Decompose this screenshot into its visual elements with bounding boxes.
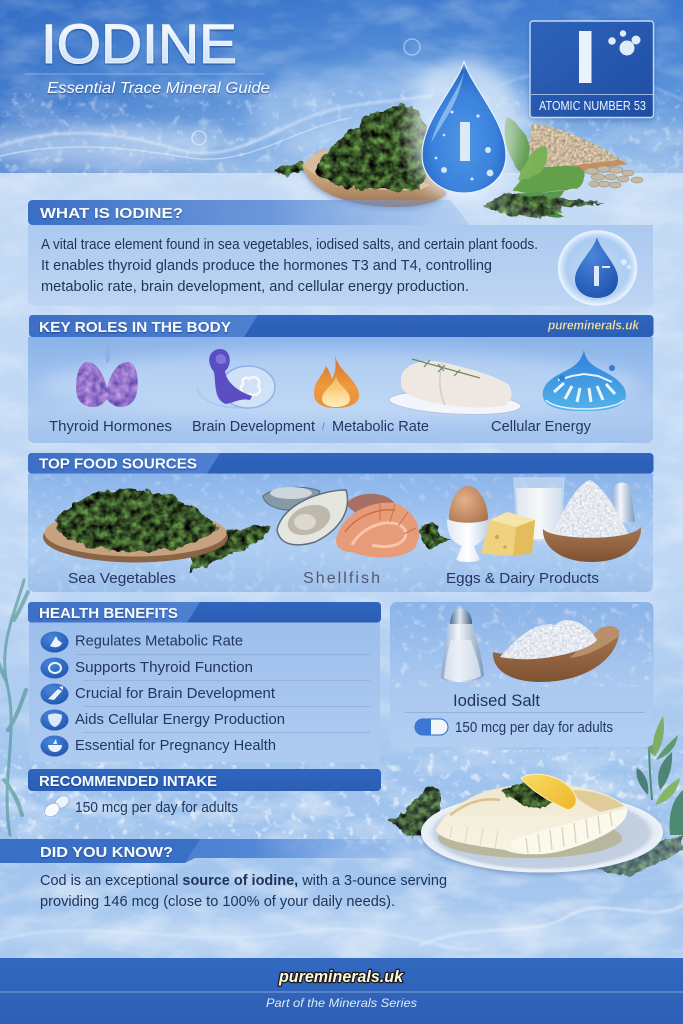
- sprig: left of bowl: [272, 160, 306, 177]
- milk glass: [514, 478, 564, 540]
- salmon piece: [346, 494, 396, 525]
- plate: [421, 792, 663, 872]
- footer brand: pureminerals.uk: [278, 968, 404, 986]
- description text: It enables thyroid glands produce the hormones T3 and T4, controlling: [41, 258, 492, 274]
- icon: drop orb: [558, 231, 636, 305]
- top shell: [263, 487, 320, 510]
- did you know text: [40, 873, 447, 910]
- sea vegetables on plate: [43, 489, 272, 572]
- herbs: [500, 782, 556, 810]
- salt pile: [550, 480, 630, 545]
- label: shellfish: Shellfish: [303, 570, 380, 587]
- header: key roles in the body: [29, 315, 654, 337]
- series line: Part of the Minerals Series: [266, 998, 417, 1010]
- salt shaker: [611, 482, 635, 522]
- subtitle: Essential Trace Mineral Guide: [47, 80, 270, 97]
- label: cellular energy: Cellular Energy: [491, 418, 591, 435]
- benefit: aids cellular energy production: [40, 710, 285, 730]
- oyster: [277, 490, 348, 545]
- header: what is iodine: WHAT IS IODINE?: [40, 205, 183, 222]
- salt shaker: [441, 608, 484, 682]
- label: metabolic rate: Metabolic Rate: [332, 418, 429, 435]
- icon: flame: [314, 355, 359, 408]
- header: health benefits: [28, 602, 381, 622]
- header: health benefits: HEALTH BENEFITS: [39, 605, 178, 622]
- panel: iodised salt: [390, 602, 654, 747]
- label: thyroid hormones: Thyroid Hormones: [49, 418, 172, 435]
- panel: top food sources: [28, 474, 653, 592]
- header: key roles in the body: KEY ROLES IN THE BODY: [39, 319, 231, 336]
- header: recommended intake: [28, 769, 381, 791]
- sauce: [438, 818, 622, 858]
- description text: A vital trace element found in sea vegetables, iodised salts, and certain plant foods.: [41, 237, 538, 253]
- description text: [41, 237, 538, 295]
- header: top food sources: TOP FOOD SOURCES: [39, 456, 197, 472]
- panel: what is iodine: [28, 225, 653, 306]
- did you know text: providing 146 mcg (close to 100% of your daily needs).: [40, 894, 395, 910]
- sprig: [388, 785, 440, 838]
- icon: thyroid: [76, 343, 138, 407]
- panel: health benefits: [28, 602, 381, 762]
- panel: key roles in the body: [28, 337, 653, 443]
- eggs and dairy group: [447, 478, 641, 562]
- header: what is iodine: [28, 200, 470, 225]
- cheese: [481, 512, 535, 556]
- recommended intake line: 150 mcg per day for adults: [75, 799, 238, 816]
- molecule icon: [608, 30, 640, 56]
- did you know text: Cod is an exceptional source of iodine, with a 3-ounce serving: [40, 873, 447, 889]
- benefit: aids cellular energy production: Aids Cellular Energy Production: [75, 711, 285, 728]
- spinach leaves: [505, 118, 584, 218]
- label: eggs and dairy products: Eggs & Dairy Products: [446, 570, 599, 587]
- egg: [449, 486, 488, 527]
- label: iodised salt: Iodised Salt: [453, 691, 540, 710]
- brand tag: pureminerals.uk: [547, 318, 640, 332]
- benefit: regulates metabolic rate: Regulates Metabolic Rate: [75, 632, 243, 650]
- dried seaweed pile: [316, 106, 428, 190]
- hero illustration: [272, 56, 643, 218]
- icon: fetus: [197, 349, 275, 408]
- big water drop: [408, 56, 520, 204]
- cod plate illustration: [388, 774, 683, 876]
- intake text: 150 mcg per day for adults: [455, 719, 613, 736]
- element card: iodine: [530, 21, 654, 118]
- icon: cellular energy: [543, 350, 626, 411]
- separator: /: [322, 422, 325, 433]
- benefit: supports thyroid function: Supports Thyroid Function: [75, 659, 253, 676]
- lemon wedge: [521, 774, 576, 810]
- wooden bowl: [302, 149, 446, 207]
- bowl of salt: [493, 620, 619, 682]
- egg cup: [447, 519, 490, 562]
- shellfish group: [263, 487, 449, 558]
- benefit: crucial for brain development: [40, 684, 276, 704]
- header: top food sources: [28, 453, 654, 474]
- benefit: supports thyroid function: [40, 658, 253, 678]
- wooden bowl: [543, 527, 641, 562]
- benefit: regulates metabolic rate: [40, 632, 243, 652]
- icon: pills: [42, 793, 71, 820]
- shrimp: [336, 503, 419, 558]
- header: recommended intake: RECOMMENDED INTAKE: [39, 773, 217, 790]
- beans: [585, 166, 643, 188]
- seaweed decoration: right edge: [636, 716, 683, 835]
- recommended intake line: [42, 793, 238, 820]
- sprig front right: [592, 835, 683, 876]
- seaweed decoration: left edge: [0, 580, 28, 835]
- icon: fish fillet on plate: [389, 359, 521, 417]
- atomic number: ATOMIC NUMBER 53: [539, 99, 646, 113]
- header: did you know: [0, 839, 420, 863]
- icon: capsule: [415, 719, 448, 735]
- fish fillet: [436, 783, 627, 854]
- element symbol: [579, 31, 592, 83]
- title: IODINE: [41, 12, 237, 75]
- label: sea vegetables: Sea Vegetables: [68, 570, 176, 587]
- header: did you know: DID YOU KNOW?: [40, 844, 173, 861]
- benefit: essential for pregnancy health: [40, 736, 276, 756]
- benefit: essential for pregnancy health: Essential for Pregnancy Health: [75, 737, 276, 754]
- benefit: crucial for brain development: Crucial for Brain Development: [75, 685, 276, 702]
- footer: [0, 958, 683, 1024]
- grains pile: [528, 124, 628, 170]
- description text: metabolic rate, brain development, and cellular energy production.: [41, 279, 469, 295]
- label: brain development: Brain Development: [192, 418, 316, 435]
